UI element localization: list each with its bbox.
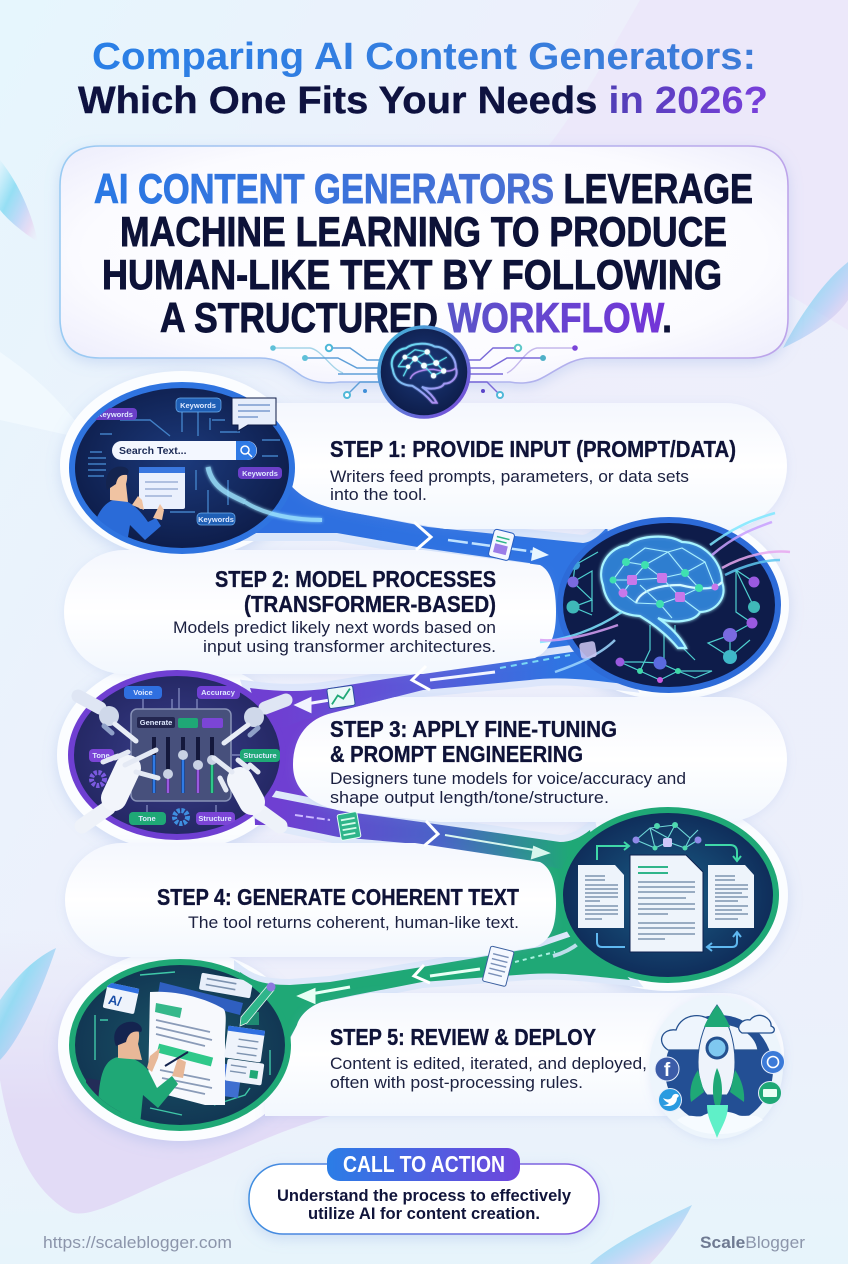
intro headline: AI CONTENT GENERATORS LEVERAGE — [94, 165, 753, 212]
network above documents — [632, 822, 702, 850]
keyword tags: Keywords — [180, 401, 216, 410]
arrow details: step 4 to step 5 — [300, 928, 590, 1002]
step 1 text: Writers feed prompts, parameters, or data sets — [330, 467, 689, 486]
social icons — [655, 1050, 784, 1112]
search bar — [112, 441, 257, 460]
cards — [103, 973, 259, 1098]
icon: central AI brain badge — [270, 327, 578, 417]
step 2 text — [173, 566, 496, 656]
person — [97, 466, 164, 540]
loop arrows — [597, 842, 741, 861]
illustration: step 3 tuning console — [71, 673, 286, 837]
setting tags: Tone — [138, 814, 156, 823]
icon: document on arrow — [488, 529, 515, 561]
keyword tags: Keywords — [242, 469, 278, 478]
CTA box: utilize AI for content creation. — [308, 1204, 540, 1223]
CTA box: Understand the process to effectively — [277, 1186, 572, 1205]
step 3 text — [330, 716, 686, 807]
title: Comparing AI Content Generators: — [92, 36, 756, 78]
footer brand: ScaleBlogger — [700, 1233, 805, 1252]
step 3 text: Designers tune models for voice/accuracy and — [330, 769, 686, 788]
setting tags: Structure — [198, 814, 232, 823]
step 2 text: (TRANSFORMER-BASED) — [244, 591, 496, 617]
step 1 text — [330, 436, 736, 504]
step 3 text: shape output length/tone/structure. — [330, 788, 609, 807]
circuit lines right — [467, 345, 578, 398]
browser window — [139, 467, 185, 509]
illustration: step 4 generated documents — [560, 810, 776, 980]
arrow details: step 1 to step 2 — [414, 522, 549, 561]
setting tags — [89, 686, 280, 825]
search bar: Search Text... — [119, 445, 187, 457]
cards: A/ — [107, 992, 123, 1009]
step 3 text: STEP 3: APPLY FINE-TUNING — [330, 716, 617, 742]
step 5 text: often with post-processing rules. — [330, 1073, 583, 1092]
side networks — [573, 552, 754, 680]
person — [98, 1022, 188, 1125]
step 5 text: Content is edited, iterated, and deployed, — [330, 1054, 647, 1073]
step 2 text: Models predict likely next words based on — [173, 618, 496, 637]
illustration: step 1 input — [72, 385, 322, 555]
setting tags: Voice — [133, 688, 153, 697]
control panel — [131, 709, 231, 801]
documents — [578, 855, 754, 952]
step 4 text: STEP 4: GENERATE COHERENT TEXT — [157, 884, 519, 910]
arrow: step 4 to step 5 — [240, 930, 630, 1060]
panel: step 2 — [64, 550, 556, 674]
step 2 text: input using transformer architectures. — [203, 637, 496, 656]
step 1 text: into the tool. — [330, 485, 427, 504]
arrow details: step 3 to step 4 — [295, 811, 548, 858]
panel: step 3 — [293, 697, 787, 822]
title — [78, 36, 768, 122]
CTA box — [249, 1164, 599, 1234]
title: Which One Fits Your Needs in 2026? — [78, 80, 768, 122]
intro headline: MACHINE LEARNING TO PRODUCE — [120, 208, 727, 255]
icon: chart card on arrow — [327, 685, 355, 709]
keyword tags: Keywords — [97, 410, 133, 419]
footer url: https://scaleblogger.com — [43, 1233, 232, 1252]
arrow: step 1 to step 2 — [255, 478, 620, 682]
energy streaks — [540, 513, 790, 672]
call to action — [249, 1148, 599, 1234]
circuit lines left — [270, 345, 380, 398]
CTA label — [327, 1148, 520, 1181]
step 3 text: & PROMPT ENGINEERING — [330, 741, 583, 767]
speech bubble — [232, 398, 276, 431]
panel: step 5 — [265, 993, 784, 1116]
data flow swoosh — [208, 467, 245, 502]
panel: step 1 — [260, 403, 787, 529]
gears — [92, 772, 188, 824]
panel: step 4 — [65, 843, 556, 957]
keyword tags: Keywords — [198, 515, 234, 524]
step 4 text — [157, 884, 519, 932]
intro headline: A STRUCTURED WORKFLOW. — [160, 294, 672, 341]
icon: green document on arrow — [337, 811, 361, 841]
arrow: step 2 to step 3 — [250, 648, 625, 825]
brain mesh — [601, 537, 723, 648]
clouds — [662, 1015, 774, 1050]
setting tags: Accuracy — [201, 688, 236, 697]
illustration: step 2 brain — [540, 513, 790, 690]
illustration: rocket launch — [649, 995, 784, 1139]
step 4 text: The tool returns coherent, human-like text. — [188, 913, 519, 932]
flame — [707, 1105, 728, 1138]
arrow: step 3 to step 4 — [252, 795, 606, 975]
panel: intro statement — [60, 146, 788, 383]
robot hands — [78, 696, 286, 826]
step 5 text: STEP 5: REVIEW & DEPLOY — [330, 1024, 596, 1050]
rocket body — [690, 1005, 744, 1105]
social icons: f — [664, 1060, 671, 1081]
step 5 text — [330, 1024, 647, 1092]
arrow details: step 2 to step 3 — [297, 655, 570, 711]
cloud base — [677, 1111, 763, 1134]
icon: paper sheet on arrow — [482, 946, 514, 987]
keyword tags — [93, 398, 282, 525]
control panel: Generate — [140, 718, 172, 727]
step 2 text: STEP 2: MODEL PROCESSES — [215, 566, 496, 592]
setting tags: Structure — [243, 751, 277, 760]
illustration: step 5 review — [72, 962, 288, 1128]
pen — [240, 982, 276, 1026]
document — [148, 982, 243, 1105]
brain outline — [392, 344, 457, 403]
CTA label: CALL TO ACTION — [343, 1151, 505, 1177]
chair — [86, 1078, 121, 1112]
intro headline: HUMAN-LIKE TEXT BY FOLLOWING — [102, 251, 722, 298]
step 1 text: STEP 1: PROVIDE INPUT (PROMPT/DATA) — [330, 436, 736, 462]
setting tags: Tone — [92, 751, 110, 760]
small right cards — [224, 1026, 265, 1086]
intro headline — [94, 165, 753, 341]
